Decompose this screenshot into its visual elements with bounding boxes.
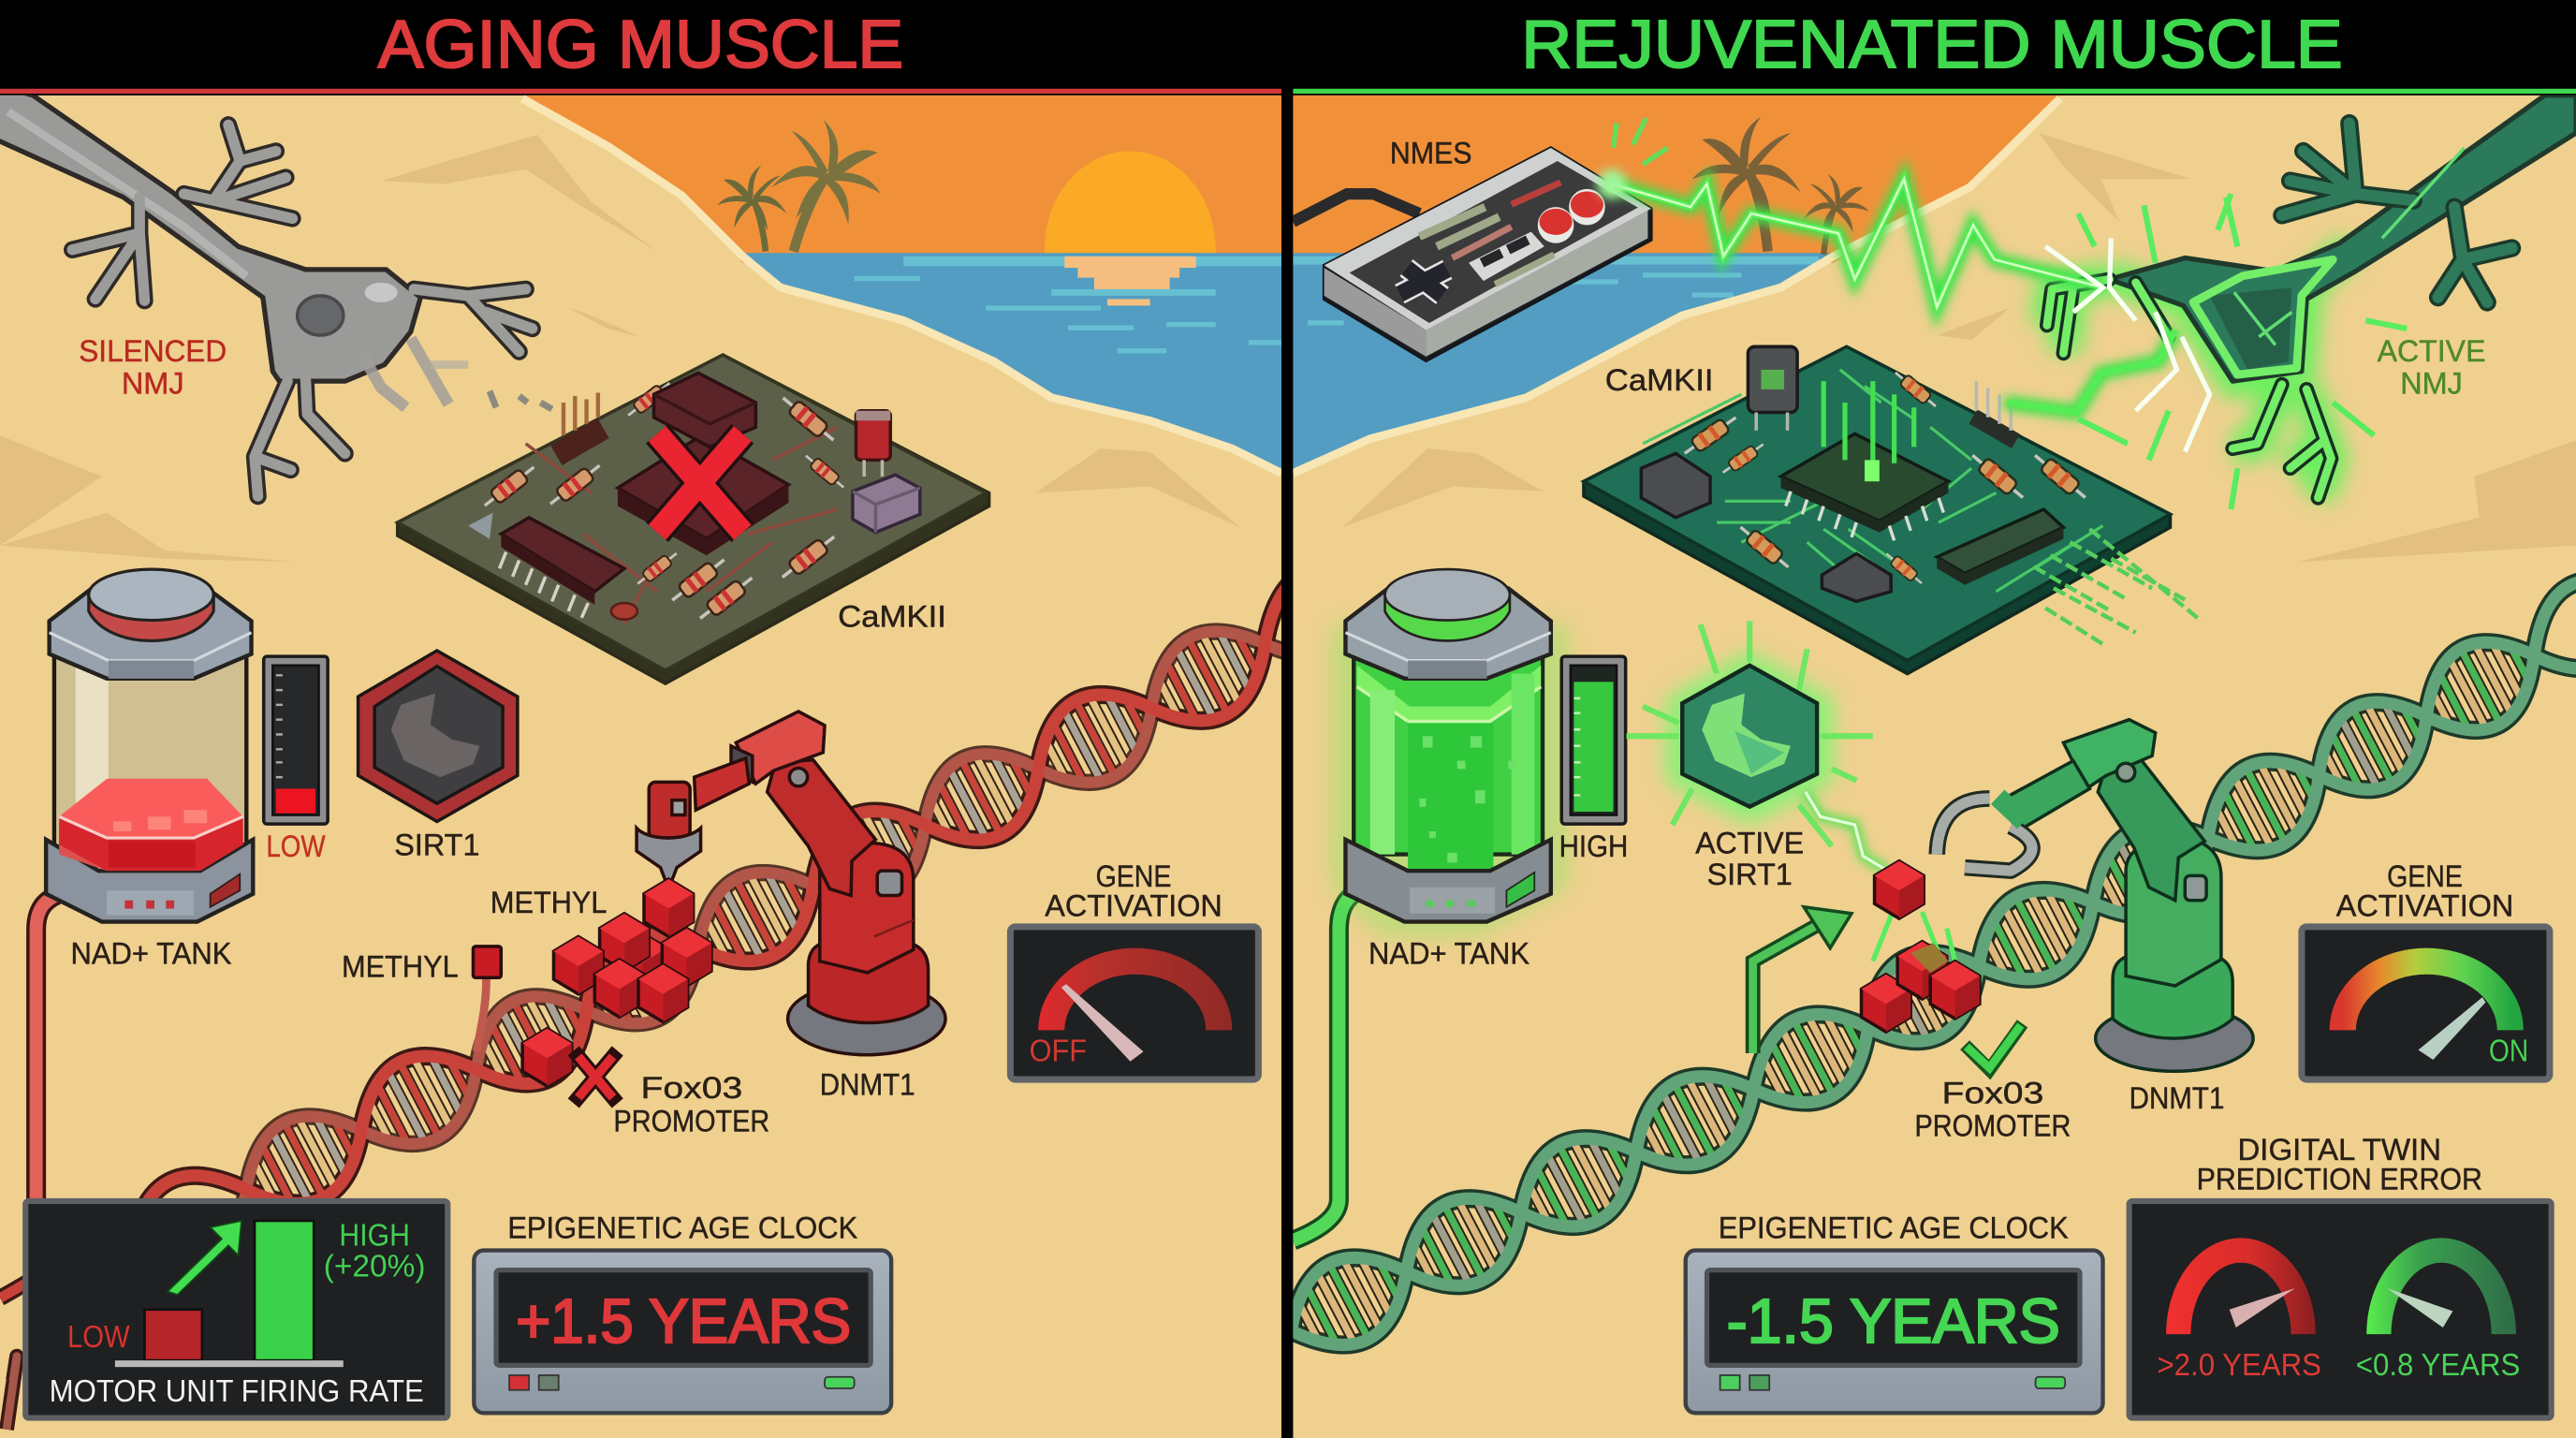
green error gauge: <0.8 YEARS [2356, 1348, 2520, 1383]
labels: methyl [342, 886, 607, 983]
neuron: silenced NMJ [0, 82, 552, 496]
gene activation on gauge: ACTIVATION [2336, 888, 2513, 922]
label: FoxO3 promoter: PROMOTER [614, 1104, 769, 1137]
red error gauge [2157, 1251, 2321, 1383]
NMES controller [1325, 148, 1651, 360]
green signal rays on chip [1823, 381, 1914, 481]
icon: SIRT1 inactive hexagon [359, 651, 518, 822]
panel divider [1281, 0, 1293, 1438]
label: FoxO3 promoter right: PROMOTER [1915, 1109, 2071, 1143]
neuron: active NMJ [2047, 95, 2576, 498]
check mark [1965, 1023, 2023, 1070]
methyl cubes detaching [1862, 942, 1980, 1032]
green activation arrow [1753, 907, 1852, 1053]
rungs [255, 634, 1257, 1201]
gene activation off gauge [1010, 859, 1258, 1079]
label: silenced NMJ [80, 340, 226, 394]
label: active NMJ: ACTIVE [2378, 334, 2485, 368]
sand dunes [0, 135, 1240, 562]
label: silenced NMJ: NMJ [122, 366, 184, 400]
digital twin prediction error: PREDICTION ERROR [2197, 1163, 2482, 1196]
sun [1045, 151, 1216, 257]
label: active NMJ: NMJ [2400, 366, 2463, 400]
motor unit firing rate chart: MOTOR UNIT FIRING RATE [50, 1374, 424, 1409]
label: FoxO3 promoter [614, 1071, 769, 1137]
sand background [0, 95, 1281, 1438]
red error gauge: >2.0 YEARS [2157, 1348, 2321, 1383]
gene activation on gauge: ON [2489, 1034, 2528, 1069]
NAD+ pipe right [1293, 888, 1367, 1240]
motor unit firing rate chart: LOW [67, 1320, 130, 1355]
motor unit firing rate chart: (+20%) [324, 1250, 426, 1284]
DNA helix right [1292, 580, 2576, 1345]
labels: methyl: METHYL [490, 886, 607, 919]
epigenetic age clock right: -1.5 YEARS [1727, 1287, 2060, 1357]
sunset sky [522, 95, 1281, 263]
circuit board right: CaMKII [1584, 346, 2170, 674]
panel: aging muscle [0, 82, 1380, 1438]
sun reflection [1064, 257, 1196, 305]
label: active SIRT1 [1695, 827, 1804, 891]
methyl cube cluster [553, 879, 711, 1022]
robotic arm: DNMT1 [637, 712, 945, 1055]
heading: aging muscle: AGING MUSCLE [378, 7, 903, 82]
heading: rejuvenated muscle: REJUVENATED MUSCLE [1521, 7, 2343, 82]
label: CaMKII: CaMKII [838, 600, 946, 634]
gene activation on gauge: GENE [2387, 859, 2463, 893]
epigenetic age clock right [1686, 1211, 2103, 1413]
label: gene activation: ACTIVATION [1045, 888, 1222, 922]
X mark: promoter blocked [578, 1056, 613, 1097]
label: NMES: NMES [1390, 137, 1472, 170]
DNA helix [139, 579, 1281, 1198]
label: FoxO3 promoter: Fox03 [640, 1071, 742, 1105]
sand background right [1293, 95, 2576, 1438]
sea right [1293, 253, 1834, 470]
DNA fragment at panel edge [0, 1275, 22, 1431]
label: gene activation: GENE [1096, 859, 1171, 893]
palm trees right [1692, 117, 1869, 255]
sea [742, 253, 1281, 470]
labels: methyl: METHYL [342, 949, 459, 983]
palm trees [717, 120, 880, 253]
digital twin prediction error: DIGITAL TWIN [2237, 1133, 2441, 1167]
lightning to methyl cube [1806, 792, 1955, 961]
epigenetic age clock: EPIGENETIC AGE CLOCK [507, 1211, 857, 1244]
label: FoxO3 promoter right [1915, 1077, 2071, 1143]
level gauge high [1561, 656, 1626, 824]
circuit board: CaMKII [398, 355, 989, 683]
label: SIRT1: SIRT1 [394, 828, 479, 861]
methyl marker connector [476, 979, 487, 1051]
sunset sky right [1293, 95, 2060, 263]
label: DNMT1: DNMT1 [820, 1068, 915, 1102]
motor unit firing rate chart [25, 1201, 447, 1418]
gene activation off gauge: OFF [1030, 1034, 1087, 1069]
NAD+ tank low [46, 569, 253, 922]
green error gauge [2356, 1251, 2520, 1383]
panel: rejuvenated muscle [1292, 95, 2576, 1438]
robotic arm right: DNMT1 [2001, 720, 2253, 1071]
label: DNMT1 right: DNMT1 [2130, 1081, 2224, 1115]
epigenetic age clock right: EPIGENETIC AGE CLOCK [1719, 1211, 2069, 1244]
label: active SIRT1: SIRT1 [1707, 858, 1793, 891]
label: low: LOW [266, 829, 326, 863]
label: CaMKII right: CaMKII [1605, 363, 1714, 397]
label: high: HIGH [1559, 829, 1628, 863]
label: active SIRT1: ACTIVE [1695, 827, 1804, 860]
header bar [0, 0, 2576, 94]
sea highlights right [1293, 257, 1819, 325]
label: active NMJ [2378, 334, 2485, 400]
X mark fill [657, 433, 742, 533]
methyl cube removed [1875, 861, 1924, 918]
epigenetic age clock [474, 1211, 891, 1413]
icon: active SIRT1 hexagon [1627, 621, 1873, 846]
gene activation on gauge [2302, 859, 2550, 1079]
epigenetic age clock: +1.5 YEARS [516, 1287, 851, 1357]
check mark fill [1967, 1025, 2021, 1068]
label: NAD+ tank right: NAD+ TANK [1368, 936, 1530, 970]
label: NAD+ tank: NAD+ TANK [70, 936, 232, 970]
label: FoxO3 promoter right: Fox03 [1942, 1077, 2043, 1110]
NMES cord [1293, 194, 1419, 222]
label: gene activation [1045, 859, 1222, 922]
level gauge low [264, 656, 328, 824]
X mark fill [578, 1056, 613, 1097]
green signal streaks off board [2034, 529, 2202, 644]
robotic claw open [1937, 797, 2032, 871]
motor unit firing rate chart: HIGH [339, 1218, 410, 1253]
shoreline right [1293, 98, 2060, 473]
methyl marker square [473, 946, 501, 977]
lightning: NMES pulse to neuron [1597, 118, 2407, 509]
DNA strand colours right [1292, 580, 2576, 1345]
sand dunes right [1342, 133, 2576, 562]
label: silenced NMJ: SILENCED [79, 334, 227, 368]
digital twin prediction error [2130, 1133, 2552, 1418]
NAD+ tank pipe [37, 890, 69, 1216]
sea reflections [855, 257, 1281, 353]
X mark: CaMKII disabled [657, 433, 742, 533]
methyl cube on promoter [522, 1029, 572, 1086]
NAD+ tank high [1331, 569, 1569, 936]
shoreline [522, 98, 1281, 473]
DNA strand colours [239, 625, 1281, 1198]
